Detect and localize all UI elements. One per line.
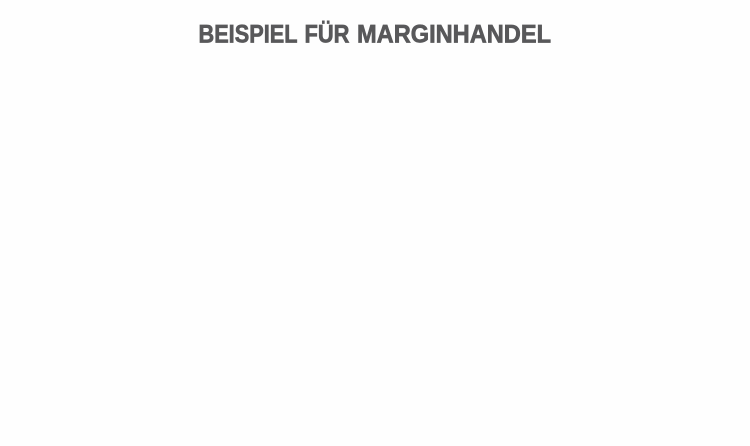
title: FÜR — [304, 20, 350, 48]
title — [198, 20, 551, 48]
title: MARGINHANDEL — [357, 20, 551, 48]
title: BEISPIEL — [198, 20, 298, 48]
